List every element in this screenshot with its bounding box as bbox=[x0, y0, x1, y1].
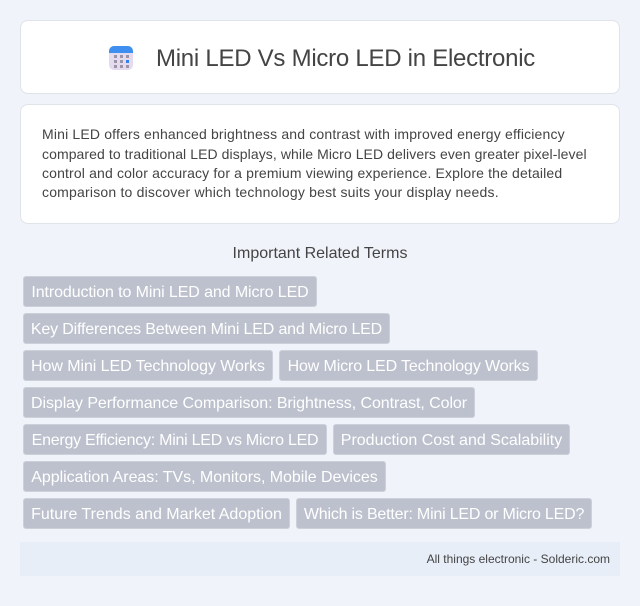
summary text bbox=[42, 126, 587, 200]
tag bbox=[23, 498, 290, 529]
tag: Introduction to Mini LED and Micro LED bbox=[31, 284, 309, 301]
tag: Energy Efficiency: Mini LED vs Micro LED bbox=[32, 432, 318, 449]
summary card bbox=[20, 104, 620, 224]
tag bbox=[333, 424, 570, 455]
footer credit: All things electronic - Solderic.com bbox=[427, 552, 610, 566]
tag: How Mini LED Technology Works bbox=[31, 358, 265, 375]
tag: Which is Better: Mini LED or Micro LED? bbox=[304, 506, 584, 523]
tag: Production Cost and Scalability bbox=[341, 432, 562, 449]
summary text: control and color accuracy for a premium viewing experience. Explore the detailed bbox=[42, 165, 562, 181]
summary text: compared to traditional LED displays, while Micro LED delivers even greater pixel-level bbox=[42, 146, 587, 162]
tag bbox=[23, 387, 475, 418]
tag: How Micro LED Technology Works bbox=[288, 358, 529, 375]
tag bbox=[23, 424, 327, 455]
title card bbox=[20, 20, 620, 94]
tag bbox=[23, 461, 386, 492]
tag list bbox=[23, 276, 592, 529]
tag: Display Performance Comparison: Brightness, Contrast, Color bbox=[31, 395, 467, 412]
tag bbox=[279, 350, 538, 381]
icon: calendar bbox=[109, 46, 133, 70]
tag: Application Areas: TVs, Monitors, Mobile Devices bbox=[31, 469, 378, 486]
footer bbox=[20, 542, 620, 576]
summary text: Mini LED offers enhanced brightness and contrast with improved energy efficiency bbox=[42, 126, 565, 142]
tag bbox=[23, 313, 390, 344]
tag: Key Differences Between Mini LED and Micro LED bbox=[31, 321, 382, 338]
section heading: Important Related Terms bbox=[233, 245, 407, 262]
summary text: comparison to discover which technology best suits your display needs. bbox=[42, 184, 499, 200]
title: Mini LED Vs Micro LED in Electronic bbox=[156, 45, 535, 72]
tag bbox=[296, 498, 592, 529]
tag bbox=[23, 276, 317, 307]
tag bbox=[23, 350, 273, 381]
tag: Future Trends and Market Adoption bbox=[31, 506, 282, 523]
